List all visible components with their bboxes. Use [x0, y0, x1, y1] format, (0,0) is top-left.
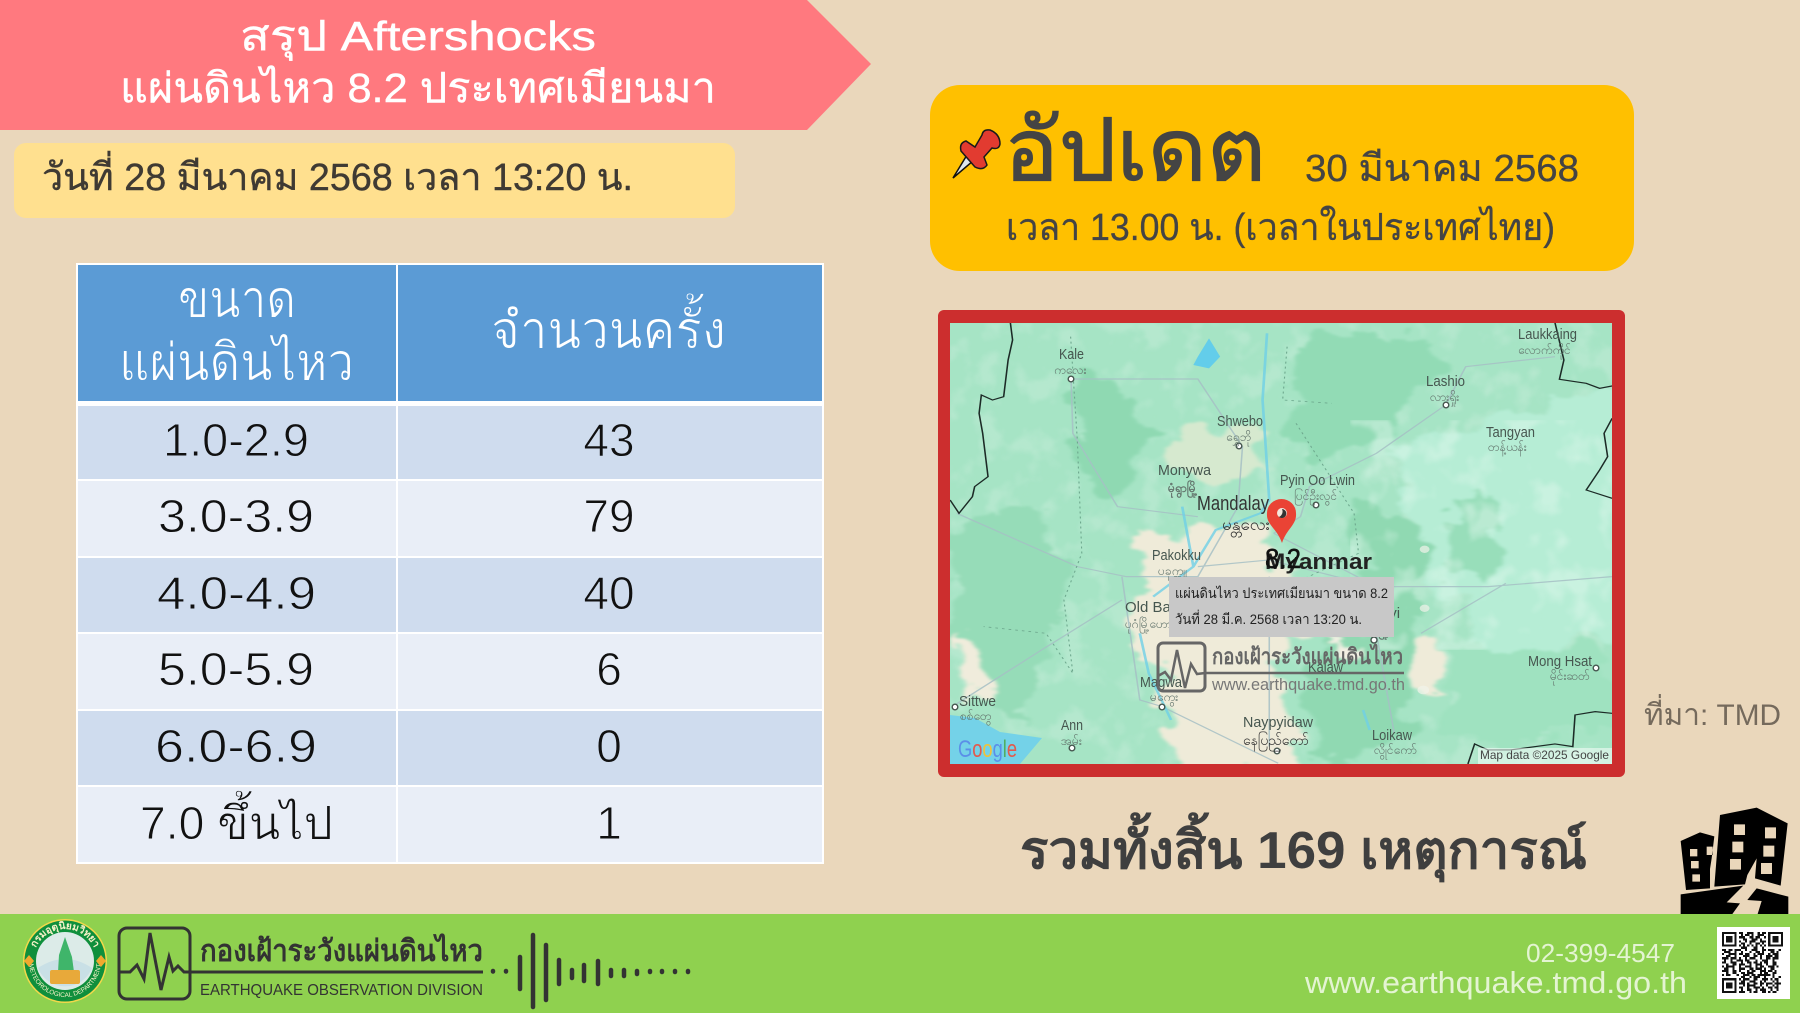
tooltip: วันที่ 28 มี.ค. 2568 เวลา 13:20 น.: [1175, 610, 1362, 627]
google logo: Google: [958, 736, 1017, 763]
map labels: တန့်ယန်း: [1488, 439, 1527, 457]
total events: รวมทั้งสิ้น 169 เหตุการณ์: [1020, 812, 1587, 883]
map labels: မန္တလေး: [1222, 515, 1270, 538]
tooltip: แผ่นดินไหว ประเทศเมียนมา ขนาด 8.2: [1175, 585, 1388, 601]
watermark: กองเฝ้าระวังแผ่นดินไหว: [1212, 643, 1403, 669]
map labels: Kale: [1059, 346, 1084, 363]
map labels: Mandalay: [1197, 493, 1269, 515]
map labels: ကလေး: [1054, 363, 1087, 377]
logo: earthquake observation division: EARTHQUAKE OBSERVATION DIVISION: [200, 982, 483, 999]
tooltip: [1169, 577, 1394, 637]
map labels: Ann: [1061, 717, 1083, 734]
map labels: Shwebo: [1217, 413, 1263, 430]
source note: ที่มา: TMD: [1644, 694, 1781, 732]
map labels: [959, 326, 1593, 760]
contact text: 02-399-4547: [1526, 938, 1675, 968]
map labels: လောက်ကိုင်: [1518, 342, 1571, 360]
icon: push pin: [953, 130, 1000, 178]
map labels: Taunggyi: [1340, 605, 1400, 622]
row 3.0-3.9: 79: [583, 490, 635, 542]
logo: meteorological department seal: กรมอุตุนิยมวิทยา: [32, 920, 98, 948]
map labels: ပုဂံမြို့ဟောင်း: [1125, 615, 1182, 634]
row 5.0-5.9: 6: [596, 643, 622, 695]
waveform: [493, 935, 688, 1007]
date box: [14, 143, 735, 218]
contact text: [1304, 938, 1687, 1000]
contact text: www.earthquake.tmd.go.th: [1304, 965, 1687, 1000]
logo: earthquake observation division: กองเฝ้าระวังแผ่นดินไหว: [200, 933, 483, 968]
map labels: Tangyan: [1486, 424, 1535, 441]
row 4.0-4.9: [78, 558, 822, 632]
icon: map marker: [1267, 499, 1296, 543]
table header: จำนวนครั้ง: [491, 293, 726, 360]
row 7.0 and above: [78, 787, 822, 862]
row 4.0-4.9: 40: [583, 567, 635, 619]
row 6.0-6.9: [78, 711, 822, 785]
table header: แผ่นดินไหว: [119, 333, 354, 392]
row 3.0-3.9: 3.0-3.9: [158, 490, 314, 542]
map labels: Monywa: [1158, 462, 1212, 479]
watermark: www.earthquake.tmd.go.th: [1211, 675, 1405, 694]
map labels: မုံရွာမြို့: [1167, 478, 1198, 499]
map roads and rivers: [952, 333, 1612, 763]
map labels: မိုင်းဆတ်: [1550, 668, 1590, 686]
map labels: Pyin Oo Lwin: [1280, 472, 1355, 489]
map panel: [938, 310, 1631, 777]
map labels: Old Bagan: [1125, 599, 1196, 616]
map labels: Mong Hsat: [1528, 653, 1593, 670]
map labels: Myanmar: [1265, 549, 1372, 574]
update panel: [930, 85, 1634, 271]
map labels: Lashio: [1426, 373, 1465, 390]
map terrain: [950, 323, 1631, 773]
title banner: [0, 0, 871, 130]
map labels: လွိုင်ကော်: [1374, 742, 1417, 760]
title banner: แผ่นดินไหว 8.2 ประเทศเมียนมา: [120, 65, 716, 111]
update panel: เวลา 13.00 น. (เวลาในประเทศไทย): [1006, 206, 1555, 249]
map labels: Kalaw: [1308, 659, 1343, 676]
map labels: 8.2: [1265, 543, 1301, 574]
title banner: สรุป Aftershocks: [240, 13, 596, 61]
map labels: Naypyidaw: [1243, 714, 1313, 731]
row 5.0-5.9: [78, 634, 822, 709]
row 1.0-2.9: 43: [583, 414, 635, 466]
map labels: အမ်း: [1061, 733, 1082, 748]
map labels: မကွေး: [1150, 690, 1178, 707]
map labels: ရွှေဘို: [1226, 429, 1251, 447]
update panel: 30 มีนาคม 2568: [1305, 148, 1579, 190]
map labels: Magwa: [1140, 674, 1183, 691]
table header: [78, 265, 822, 401]
row 7.0 and above: 7.0 ขึ้นไป: [140, 790, 333, 849]
map labels: ပြင်ဦးလွင်: [1294, 487, 1337, 506]
map labels: စစ်တွေ: [960, 708, 992, 726]
map country borders: [950, 323, 1612, 764]
map labels: လားရှိုး: [1430, 389, 1459, 407]
logo: earthquake observation division: [118, 928, 483, 999]
map labels: Loikaw: [1372, 727, 1412, 744]
icon: collapsed building: [1681, 808, 1788, 915]
date box: วันที่ 28 มีนาคม 2568 เวลา 13:20 น.: [42, 151, 633, 199]
map labels: နေပြည်တော်: [1243, 732, 1309, 751]
logo: meteorological department seal: [23, 919, 107, 1003]
map labels: Sittwe: [959, 693, 996, 710]
table header: ขนาด: [178, 271, 296, 329]
row 6.0-6.9: 6.0-6.9: [155, 720, 317, 772]
qr code: [1717, 927, 1790, 999]
map attribution: Map data ©2025 Google: [1480, 748, 1609, 762]
footer bar: [0, 914, 1800, 1013]
map labels: Laukkaing: [1518, 326, 1577, 343]
magnitude table: [76, 263, 824, 864]
row 1.0-2.9: 1.0-2.9: [163, 414, 309, 466]
map labels: Pakokku: [1152, 547, 1201, 564]
row 7.0 and above: 1: [596, 797, 622, 849]
map place markers: [952, 376, 1599, 754]
row 3.0-3.9: [78, 481, 822, 556]
row 1.0-2.9: [78, 406, 822, 479]
row 5.0-5.9: 5.0-5.9: [158, 643, 314, 695]
watermark: [1158, 643, 1405, 694]
logo: meteorological department seal: METEOROLOGICAL DEPARTMENT: [29, 964, 100, 998]
map labels: ပခုက္ကူ: [1158, 564, 1187, 581]
map labels: မြို့: [1378, 620, 1389, 641]
row 4.0-4.9: 4.0-4.9: [157, 567, 316, 619]
update panel: อัปเดต: [1004, 103, 1266, 199]
row 6.0-6.9: 0: [596, 720, 622, 772]
